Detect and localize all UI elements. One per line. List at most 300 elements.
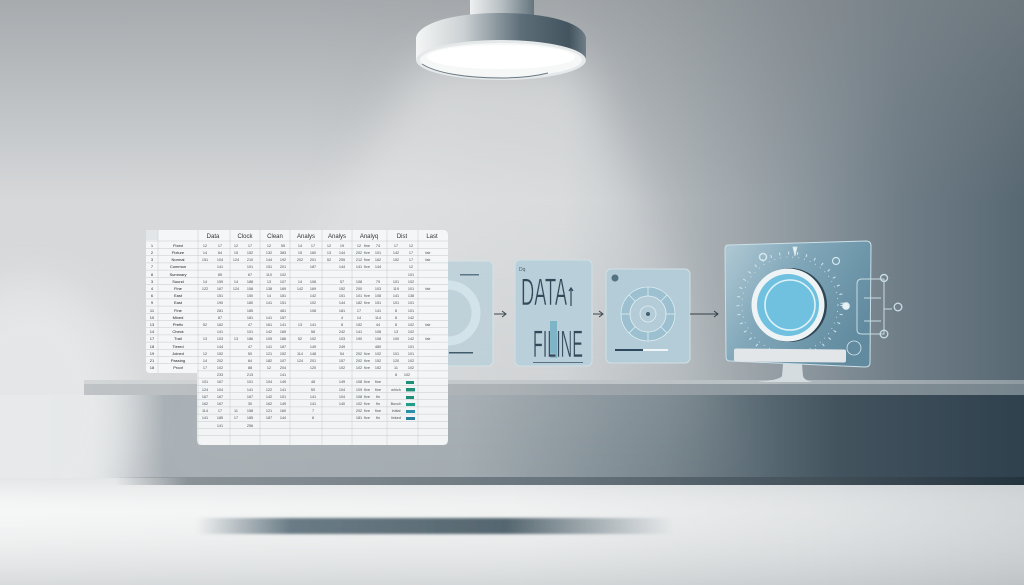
table values: fin — [376, 402, 380, 406]
table values: 383 — [280, 251, 286, 255]
table values: 167 — [217, 380, 223, 384]
table values: 185 — [217, 416, 223, 420]
spreadsheet table — [146, 230, 448, 445]
table values: 104 — [217, 388, 223, 392]
table values: 210 — [247, 258, 253, 262]
progress bar — [615, 349, 668, 351]
table values: 190 — [217, 301, 223, 305]
table values: five — [364, 366, 370, 370]
row numbers: 17 — [150, 336, 155, 341]
table values: 44 — [376, 323, 380, 327]
table header: Analys — [297, 234, 315, 240]
panel: step one behind table — [430, 261, 493, 366]
table values: 141 — [266, 301, 272, 305]
table values: 481 — [280, 309, 286, 313]
table values: 13 — [327, 251, 331, 255]
table values: 141 — [393, 294, 399, 298]
panel: data pipeline title card — [515, 260, 592, 366]
table values: 54 — [340, 352, 344, 356]
table values: 141 — [310, 402, 316, 406]
table values: 102 — [408, 366, 414, 370]
table values: 141 — [356, 265, 362, 269]
row labels: Fine — [174, 308, 183, 313]
table values: 151 — [217, 294, 223, 298]
table values: 102 — [375, 352, 381, 356]
chart: radial dial — [621, 287, 675, 341]
table values: 14 — [267, 294, 271, 298]
light cone from lamp — [160, 60, 760, 480]
table values: 144 — [375, 265, 381, 269]
table values: 157 — [339, 359, 345, 363]
table values: 101 — [408, 273, 414, 277]
wall base shadow band — [115, 477, 1024, 485]
table values: 281 — [217, 309, 223, 313]
row labels: Normal — [172, 257, 185, 262]
table values: 480 — [375, 345, 381, 349]
table values: 14 — [298, 280, 302, 284]
table values: 151 — [375, 301, 381, 305]
table values: 187 — [280, 345, 286, 349]
table values: 103 — [339, 337, 345, 341]
table values: 102 — [356, 402, 362, 406]
green status bars — [406, 381, 415, 420]
table values: 142 — [297, 287, 303, 291]
side connector diagram — [857, 274, 902, 338]
table values: 102 — [408, 323, 414, 327]
arrow two — [593, 311, 603, 317]
table values: 47 — [248, 323, 252, 327]
table values: 14 — [298, 244, 302, 248]
table values: 67 — [248, 273, 252, 277]
table values: 141 — [217, 265, 223, 269]
table values: 188 — [247, 280, 253, 284]
row labels: Proof — [173, 365, 184, 370]
table values: 167 — [217, 402, 223, 406]
table values: 138 — [266, 287, 272, 291]
row numbers: 9 — [151, 300, 154, 305]
row numbers: 18 — [150, 344, 155, 349]
table values: 149 — [310, 345, 316, 349]
row labels: Tiered — [172, 344, 184, 349]
table values: 104 — [339, 388, 345, 392]
table values: 180 — [247, 301, 253, 305]
table values: 149 — [280, 402, 286, 406]
table values: five — [364, 416, 370, 420]
row labels: Common — [170, 264, 186, 269]
table values: 160 — [280, 409, 286, 413]
table values: 55 — [281, 244, 285, 248]
table values: fin — [376, 395, 380, 399]
table values: 108 — [375, 294, 381, 298]
table values: 256 — [247, 424, 253, 428]
table values: 186 — [280, 337, 286, 341]
table values: 185 — [247, 416, 253, 420]
row labels: Joined — [172, 351, 184, 356]
table header: Data — [207, 234, 220, 240]
table values: 14 — [203, 280, 207, 284]
table values: 74 — [376, 244, 380, 248]
table values: 242 — [339, 330, 345, 334]
table values: 52 — [298, 337, 302, 341]
row numbers: 13 — [150, 322, 155, 327]
row labels: East — [174, 293, 183, 298]
dial ticks — [738, 247, 861, 357]
table values: 102 — [356, 366, 362, 370]
panel: data pipeline title card: DATA — [521, 272, 567, 314]
table values: fine — [375, 388, 381, 392]
row labels: Check — [172, 329, 184, 334]
table values: 101 — [408, 309, 414, 313]
table values: 50 — [248, 352, 252, 356]
table values: 114 — [297, 352, 303, 356]
table values: 152 — [375, 366, 381, 370]
table values: Bunch — [391, 402, 401, 406]
table values: 142 — [266, 395, 272, 399]
table values: fine — [364, 244, 370, 248]
table values: 4 — [341, 316, 343, 320]
table values: 102 — [310, 337, 316, 341]
table values: 13 — [298, 323, 302, 327]
table values: 233 — [217, 373, 223, 377]
table values: 122 — [202, 287, 208, 291]
table values: 141 — [247, 388, 253, 392]
table values: 144 — [280, 416, 286, 420]
lit left corner of wall — [0, 280, 130, 540]
table values: 149 — [339, 380, 345, 384]
monitor bottom bar — [734, 349, 846, 362]
table values: fair — [425, 258, 431, 262]
table values: 162 — [217, 323, 223, 327]
table values: 87 — [218, 316, 222, 320]
row numbers: 8 — [151, 272, 154, 277]
table values: 57 — [340, 280, 344, 284]
table values: five — [364, 294, 370, 298]
table values: 8 — [395, 316, 397, 320]
table header: Last — [426, 234, 438, 240]
table values: 162 — [202, 402, 208, 406]
table values: 158 — [247, 287, 253, 291]
row numbers: 3 — [151, 279, 154, 284]
table values: 169 — [280, 287, 286, 291]
row numbers: 7 — [151, 264, 154, 269]
table values: 141 — [310, 323, 316, 327]
row labels: Fine — [174, 286, 183, 291]
table values: 212 — [356, 258, 362, 262]
table values: 142 — [266, 330, 272, 334]
table values: 110 — [266, 273, 272, 277]
icon: card badge — [612, 274, 618, 282]
table values: 102 — [339, 366, 345, 370]
table values: 14 — [357, 316, 361, 320]
table values: 12 — [267, 366, 271, 370]
table values: 249 — [339, 345, 345, 349]
table values: 124 — [233, 258, 239, 262]
table values: 101 — [408, 345, 414, 349]
table values: 14 — [203, 359, 207, 363]
table values: 202 — [356, 409, 362, 413]
ceiling lamp — [416, 0, 586, 80]
row numbers: 11 — [150, 308, 155, 313]
table values: fine — [375, 409, 381, 413]
table values: 201 — [310, 359, 316, 363]
row labels: Summary — [169, 272, 187, 277]
table values: 202 — [297, 258, 303, 262]
table values: 101 — [247, 265, 253, 269]
table values: 102 — [310, 301, 316, 305]
table values: five — [364, 380, 370, 384]
row numbers: 14 — [150, 329, 155, 334]
table values: 140 — [339, 402, 345, 406]
table values: 201 — [310, 258, 316, 262]
table values: 148 — [310, 352, 316, 356]
panel: data pipeline title card: Dq — [519, 267, 526, 273]
table values: 124 — [297, 359, 303, 363]
table values: 108 — [375, 330, 381, 334]
grid lines — [146, 230, 448, 445]
monitor screen — [725, 241, 871, 367]
table values: 88 — [248, 366, 252, 370]
table values: 144 — [339, 301, 345, 305]
row labels: Prefix — [173, 322, 183, 327]
table values: 151 — [280, 301, 286, 305]
table values: 151 — [339, 294, 345, 298]
table header: Clock — [237, 234, 253, 240]
table values: five — [364, 359, 370, 363]
table values: 64 — [218, 251, 222, 255]
table values: 120 — [393, 359, 399, 363]
row numbers: 18 — [150, 365, 155, 370]
table values: 187 — [310, 265, 316, 269]
monitor — [725, 241, 902, 382]
table values: 30 — [248, 402, 252, 406]
table values: 7 — [312, 409, 314, 413]
row labels: Fixed — [173, 243, 183, 248]
table values: 102 — [408, 280, 414, 284]
table values: 141 — [217, 330, 223, 334]
table values: 79 — [376, 280, 380, 284]
table values: 108 — [375, 337, 381, 341]
table values: 114 — [375, 316, 381, 320]
table values: 157 — [280, 316, 286, 320]
table values: five — [364, 301, 370, 305]
table values: 102 — [217, 366, 223, 370]
table values: 181 — [247, 316, 253, 320]
table values: 192 — [280, 258, 286, 262]
table values: 104 — [339, 395, 345, 399]
table values: 144 — [339, 265, 345, 269]
table values: 190 — [356, 337, 362, 341]
table values: 11 — [234, 409, 238, 413]
table values: 182 — [356, 301, 362, 305]
floor — [0, 478, 1024, 585]
arrow one — [494, 311, 506, 317]
row numbers: 4 — [151, 286, 154, 291]
table values: 169 — [310, 287, 316, 291]
table values: 52 — [203, 323, 207, 327]
table values: 11 — [394, 366, 398, 370]
floor shadow — [196, 518, 673, 534]
table values: 167 — [202, 395, 208, 399]
shelf — [84, 380, 1024, 395]
table values: Initial — [392, 409, 401, 413]
table values: 101 — [393, 352, 399, 356]
table header: Clean — [267, 234, 283, 240]
table values: 201 — [280, 265, 286, 269]
table values: 255 — [339, 258, 345, 262]
table values: 124 — [202, 388, 208, 392]
row numbers: 2 — [151, 250, 154, 255]
table values: 181 — [280, 294, 286, 298]
table header — [207, 234, 438, 240]
table values: 161 — [266, 323, 272, 327]
table values: 101 — [408, 287, 414, 291]
table values: 12 — [203, 352, 207, 356]
table values: five — [364, 395, 370, 399]
table values: 151 — [202, 258, 208, 262]
row labels: Fixture — [172, 250, 185, 255]
table values: 158 — [247, 409, 253, 413]
row numbers: 3 — [151, 257, 154, 262]
table values: 101 — [408, 301, 414, 305]
row labels — [169, 243, 187, 370]
table values: 101 — [356, 294, 362, 298]
table values: 167 — [217, 287, 223, 291]
table values: 47 — [248, 345, 252, 349]
table values — [202, 244, 431, 428]
table values: 141 — [280, 373, 286, 377]
table values: fair — [425, 251, 431, 255]
table values: fair — [425, 287, 431, 291]
table values: 8 — [395, 309, 397, 313]
table values: 141 — [280, 388, 286, 392]
table values: 152 — [375, 359, 381, 363]
table values: 187 — [266, 416, 272, 420]
table values: 17 — [248, 244, 252, 248]
table values: 152 — [393, 258, 399, 262]
table values: 152 — [356, 323, 362, 327]
table values: fine — [375, 380, 381, 384]
table values: 102 — [408, 359, 414, 363]
table values: 121 — [266, 409, 272, 413]
table values: 108 — [356, 280, 362, 284]
table values: five — [364, 251, 370, 255]
table values: five — [364, 265, 370, 269]
row labels: Trail — [174, 336, 182, 341]
table values: 141 — [217, 424, 223, 428]
table values: 101 — [202, 380, 208, 384]
table values: 14 — [203, 251, 207, 255]
table values: 204 — [280, 366, 286, 370]
table values: 152 — [280, 352, 286, 356]
table values: 50 — [311, 388, 315, 392]
table values: 13 — [394, 330, 398, 334]
monitor stand — [757, 364, 812, 382]
table values: 52 — [327, 258, 331, 262]
table values: 108 — [310, 309, 316, 313]
table values: 119 — [393, 287, 399, 291]
table values: 8 — [312, 416, 314, 420]
row numbers: 21 — [150, 358, 155, 363]
table values: five — [364, 352, 370, 356]
table values: 107 — [280, 280, 286, 284]
table values: 181 — [339, 309, 345, 313]
table values: 101 — [408, 352, 414, 356]
table values: 141 — [202, 416, 208, 420]
row labels: Mixed — [173, 315, 183, 320]
table values: 200 — [356, 287, 362, 291]
table values: 124 — [233, 287, 239, 291]
table values: 141 — [266, 316, 272, 320]
table values: 17 — [394, 244, 398, 248]
table values: 202 — [356, 359, 362, 363]
table values: 100 — [393, 337, 399, 341]
table values: 102 — [404, 373, 410, 377]
table values: fair — [425, 337, 431, 341]
table values: 13 — [203, 337, 207, 341]
table header: Dist — [397, 234, 407, 240]
table values: 181 — [356, 416, 362, 420]
table values: fine — [364, 258, 370, 262]
table values: 162 — [266, 402, 272, 406]
table values: 84 — [248, 359, 252, 363]
table values: 102 — [408, 330, 414, 334]
panel: dial card — [606, 269, 690, 363]
table values: 144 — [217, 345, 223, 349]
table values: 162 — [375, 258, 381, 262]
table values: fin — [376, 416, 380, 420]
table values: 141 — [280, 323, 286, 327]
table values: 13 — [267, 280, 271, 284]
table values: 152 — [339, 287, 345, 291]
table values: 104 — [217, 258, 223, 262]
table values: 108 — [310, 280, 316, 284]
row numbers — [150, 243, 155, 370]
table values: 141 — [310, 395, 316, 399]
table values: 85 — [218, 273, 222, 277]
table values: 138 — [408, 294, 414, 298]
table values: 108 — [356, 380, 362, 384]
table values: 107 — [280, 359, 286, 363]
table values: which — [391, 388, 401, 392]
table header: Analyq — [360, 234, 378, 240]
table values: 142 — [310, 294, 316, 298]
table values: 17 — [203, 366, 207, 370]
table values: 17 — [409, 258, 413, 262]
table values: 15 — [298, 251, 302, 255]
table values: 213 — [247, 373, 253, 377]
table values: 19 — [340, 244, 344, 248]
table values: 17 — [234, 416, 238, 420]
table values: 141 — [356, 330, 362, 334]
table values: 144 — [266, 258, 272, 262]
row numbers: 19 — [150, 351, 155, 356]
table values: 202 — [356, 352, 362, 356]
table values: 104 — [266, 380, 272, 384]
table values: 12 — [409, 244, 413, 248]
table values: 202 — [356, 251, 362, 255]
row labels: East — [174, 300, 183, 305]
table values: linked — [391, 416, 401, 420]
table values: 8 — [395, 323, 397, 327]
arrow three — [690, 311, 718, 317]
table values: 15 — [234, 251, 238, 255]
table values: five — [364, 409, 370, 413]
table values: 165 — [280, 330, 286, 334]
table values: 182 — [266, 359, 272, 363]
table values: 103 — [375, 287, 381, 291]
table values: 159 — [217, 280, 223, 284]
table values: 152 — [247, 251, 253, 255]
